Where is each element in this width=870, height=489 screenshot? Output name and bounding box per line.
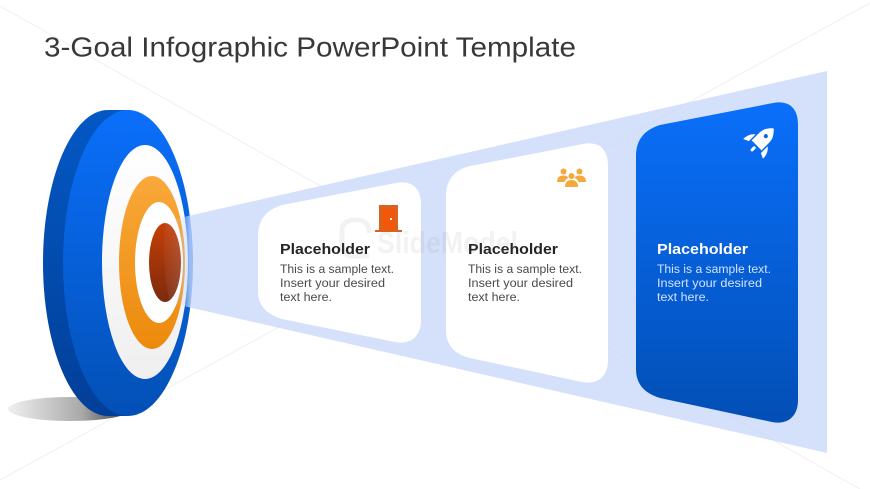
card 1 body text: text here. bbox=[280, 290, 332, 304]
target outer blue ring bbox=[63, 110, 193, 416]
card 3 shape bbox=[636, 102, 798, 423]
card 1 body text bbox=[280, 262, 394, 304]
card 1 shape bbox=[258, 182, 421, 343]
target orange ring bbox=[119, 176, 185, 349]
panel: card 2 bbox=[446, 143, 608, 383]
card 2 heading: Placeholder bbox=[468, 241, 558, 258]
card 2 body text: This is a sample text. bbox=[468, 262, 582, 276]
light beam bbox=[164, 71, 827, 453]
target inner white ring bbox=[135, 202, 183, 323]
target white ring bbox=[102, 145, 188, 379]
floor shadow of target bbox=[8, 397, 132, 421]
card 3 body text: This is a sample text. bbox=[657, 262, 771, 276]
card 2 body text: text here. bbox=[468, 290, 520, 304]
card 3 body text: Insert your desired bbox=[657, 276, 762, 290]
icon: rocket bbox=[741, 118, 784, 161]
title: 3-Goal Infographic PowerPoint Template bbox=[44, 32, 576, 62]
card 2 body text bbox=[468, 262, 582, 304]
card 3 body text: text here. bbox=[657, 290, 709, 304]
target side edge bbox=[43, 110, 128, 416]
card 3 heading: Placeholder bbox=[657, 241, 748, 258]
card 2 shape bbox=[446, 143, 608, 383]
card 1 body text: This is a sample text. bbox=[280, 262, 394, 276]
card 1 heading: Placeholder bbox=[280, 241, 370, 258]
target bbox=[43, 110, 193, 416]
card 3 body text bbox=[657, 262, 771, 304]
icon: door bbox=[375, 205, 402, 232]
panel: card 1 bbox=[258, 182, 421, 343]
target bullseye bbox=[149, 223, 181, 302]
watermark: SlideModel bbox=[377, 225, 518, 260]
panel: card 3 bbox=[636, 102, 798, 423]
card 2 body text: Insert your desired bbox=[468, 276, 573, 290]
card 1 body text: Insert your desired bbox=[280, 276, 385, 290]
icon: team bbox=[557, 168, 586, 187]
watermark bbox=[342, 220, 518, 260]
